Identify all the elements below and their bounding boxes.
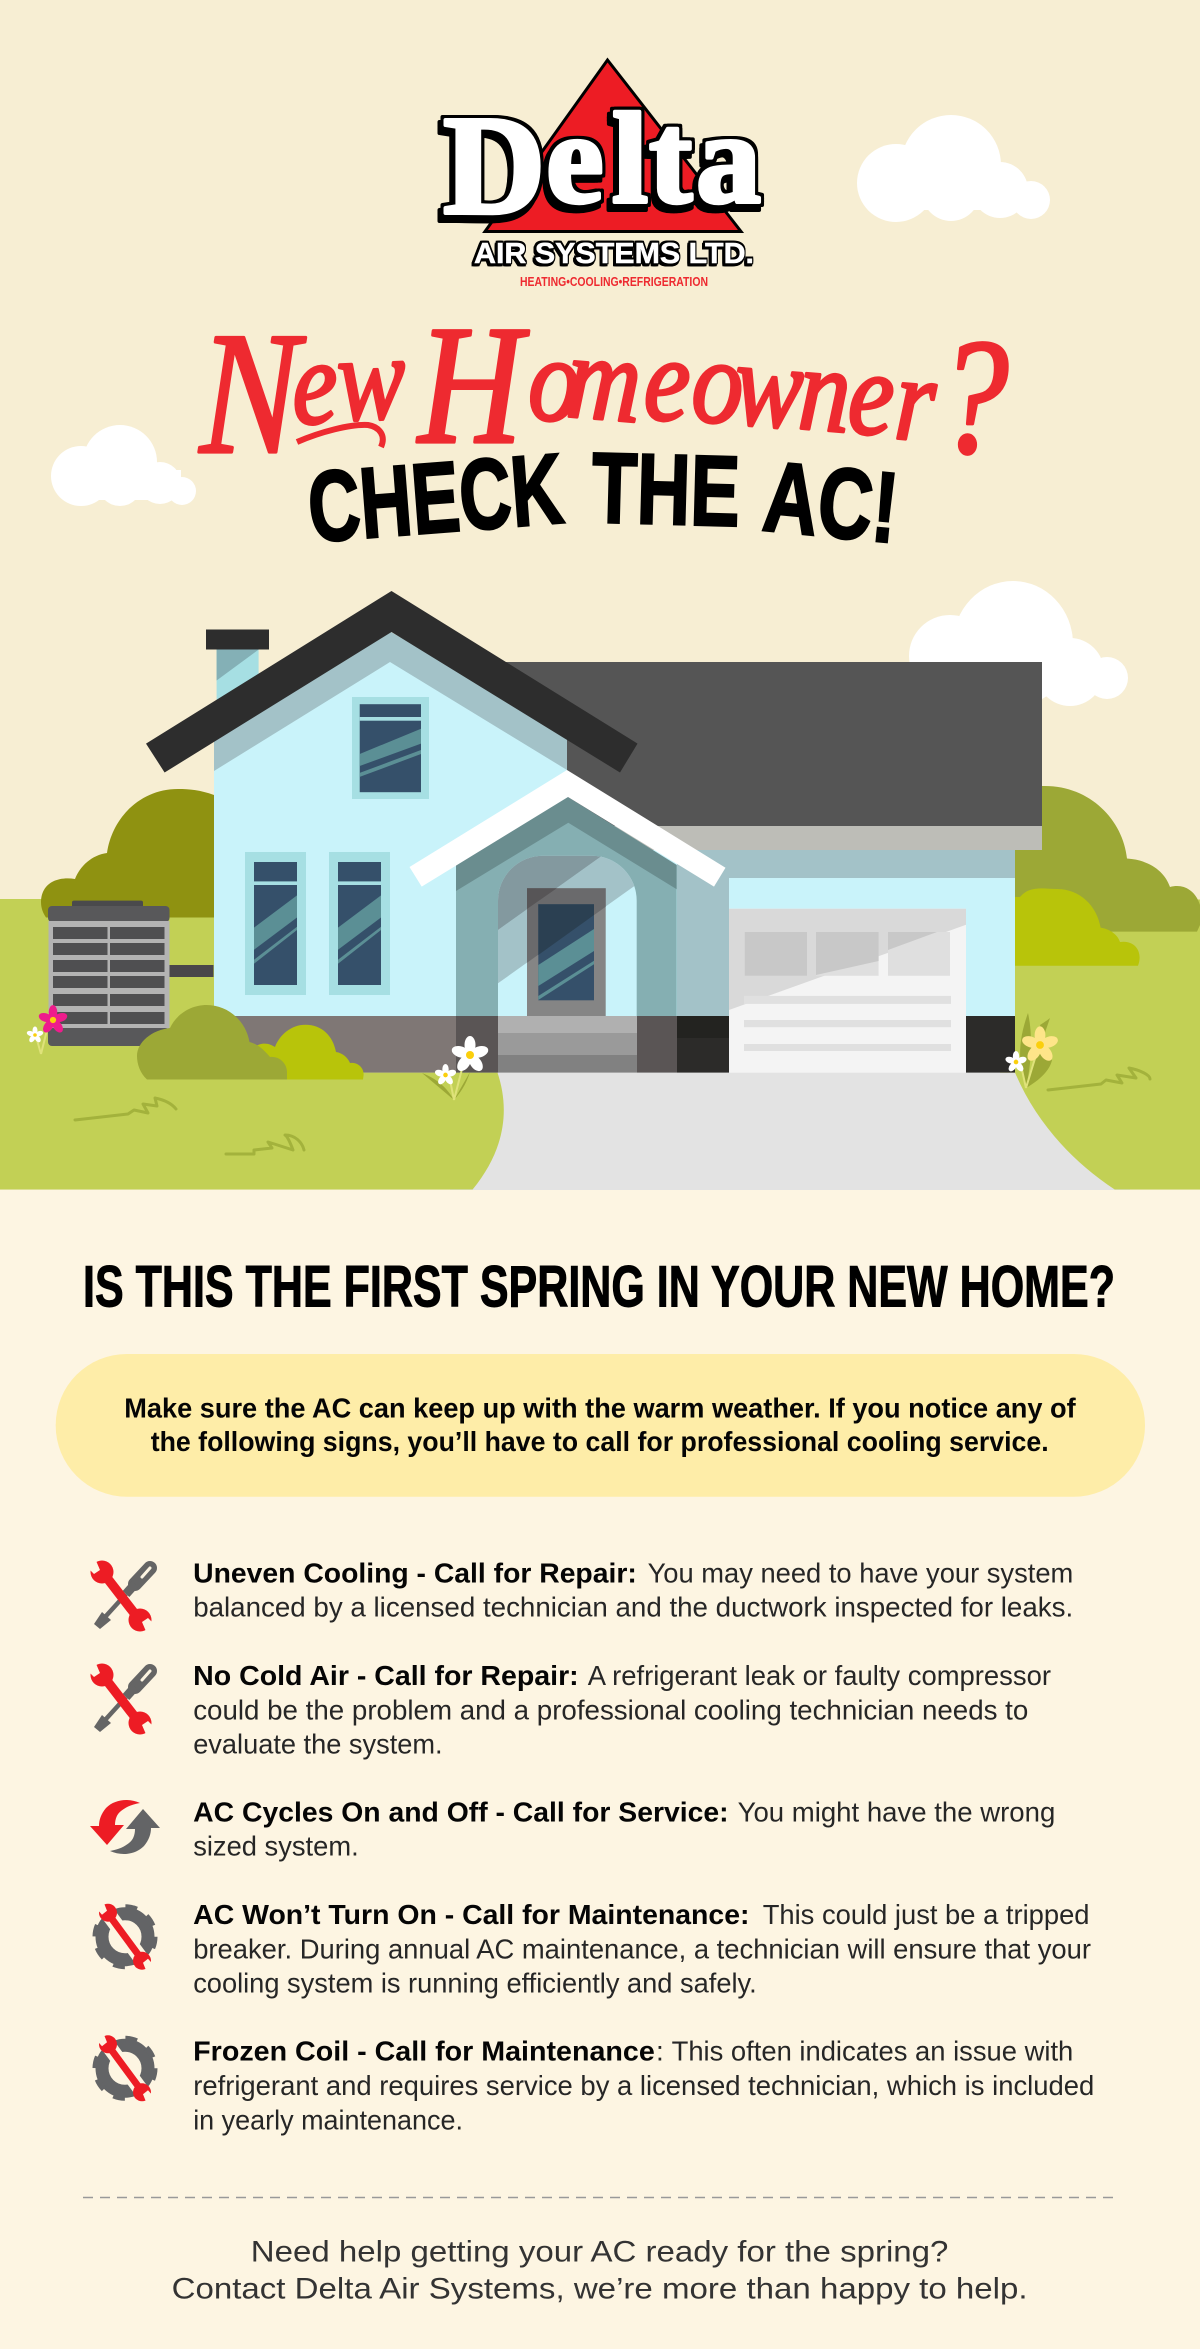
- logo subtitle: AIR SYSTEMS LTD.: [474, 238, 754, 270]
- word: CHECK: CHECK: [304, 433, 567, 564]
- item text: No Cold Air - Call for Repair:: [193, 1660, 579, 1691]
- callout text: the following signs, you’ll have to call for professional cooling service.: [151, 1426, 1049, 1457]
- item text: :: [656, 2036, 664, 2067]
- item: cycles on and off: [90, 1797, 1055, 1862]
- item text: [193, 1797, 1055, 1862]
- item text: This could just be a tripped: [763, 1899, 1090, 1930]
- logo tagline: HEATING•COOLING•REFRIGERATION: [520, 275, 708, 289]
- word: THE: THE: [590, 432, 741, 548]
- item text: Frozen Coil - Call for Maintenance: [193, 2036, 655, 2067]
- item text: [193, 1660, 1051, 1759]
- bush: front olive: [137, 1005, 287, 1080]
- left window 1: [245, 852, 306, 995]
- porch arch: [497, 850, 640, 1020]
- main roof: [146, 591, 638, 772]
- flowers: garage side: [1005, 1013, 1059, 1088]
- cloud: top right: [857, 115, 1050, 222]
- left window 2: [329, 852, 390, 995]
- logo triangle: [485, 60, 741, 232]
- door glass: [538, 904, 594, 1000]
- porch gable: [456, 797, 677, 1016]
- right lawn: [1000, 900, 1200, 1190]
- item text: cooling system is running efficiently and safely.: [193, 1968, 757, 1999]
- callout text: Make sure the AC can keep up with the warm weather. If you notice any of: [124, 1393, 1077, 1424]
- item: no cold air: [83, 1659, 1051, 1759]
- foundation dark sections: [456, 1016, 1015, 1073]
- garage roof: [500, 662, 1042, 826]
- item text: sized system.: [193, 1831, 359, 1862]
- porch steps: [498, 1016, 637, 1073]
- AC pipe: [170, 965, 214, 977]
- scene: yard and house: [0, 591, 1200, 1190]
- logo wordmark: elta: [546, 87, 761, 231]
- garage wall: [560, 850, 1015, 1016]
- icon: cycle arrows: [90, 1800, 160, 1854]
- item text: You might have the wrong: [738, 1797, 1055, 1828]
- item text: refrigerant and requires service by a licensed technician, which is included: [193, 2070, 1094, 2101]
- porch roof trim: [410, 770, 726, 887]
- word: Homeowner?: ?: [938, 307, 1009, 489]
- garage fascia: [560, 826, 1042, 850]
- flowers: left of AC: [26, 1005, 68, 1054]
- title script: New Homeowner?: [198, 291, 1009, 491]
- item text: Uneven Cooling - Call for Repair:: [193, 1558, 637, 1589]
- item text: A refrigerant leak or faulty compressor: [588, 1660, 1051, 1691]
- garage door slats: [744, 996, 951, 1051]
- footer call to action: [172, 2236, 1028, 2305]
- item text: [193, 1899, 1091, 1999]
- logo: [443, 60, 761, 289]
- item text: [193, 1558, 1073, 1623]
- title: CHECK THE AC!: [304, 432, 903, 565]
- driveway: [450, 1072, 1130, 1190]
- item text: You may need to have your system: [648, 1558, 1073, 1589]
- item: frozen coil: [94, 2030, 1094, 2135]
- bush: back right: [1015, 786, 1200, 932]
- logo wordmark: D: [443, 86, 546, 244]
- word: New: ew: [290, 312, 407, 451]
- item text: AC Won’t Turn On - Call for Maintenance:: [193, 1899, 749, 1930]
- flowers: porch: [422, 1036, 490, 1100]
- swash under New: [297, 425, 383, 447]
- icon: gear and wrench: [94, 2030, 156, 2106]
- word: New: N: [198, 297, 306, 491]
- item text: [193, 2036, 1094, 2135]
- sky background: [0, 0, 1200, 1190]
- foundation: [214, 1016, 456, 1073]
- AC louvres: [53, 927, 164, 1024]
- item text: AC Cycles On and Off - Call for Service:: [193, 1797, 729, 1828]
- cloud: behind house: [909, 581, 1128, 707]
- chimney: [206, 630, 269, 724]
- bush: front right: [1015, 888, 1140, 966]
- icon: wrench and screwdriver: [83, 1659, 159, 1739]
- grass tufts: [75, 1068, 1150, 1154]
- left lawn: [0, 899, 504, 1190]
- cloud: left: [51, 425, 196, 506]
- garage door: [729, 909, 966, 1073]
- word: AC!: AC!: [759, 440, 903, 565]
- main wall: [214, 632, 567, 1016]
- bush: back left: [41, 789, 214, 918]
- item: won't turn on: [94, 1899, 1091, 1999]
- icon: gear and wrench: [94, 1899, 156, 1975]
- footer call to action: Need help getting your AC ready for the spring?: [251, 2236, 948, 2269]
- item text: could be the problem and a professional cooling technician needs to: [193, 1694, 1028, 1725]
- callout pill: [56, 1354, 1145, 1497]
- item text: balanced by a licensed technician and the ductwork inspected for leaks.: [193, 1592, 1073, 1623]
- intro callout: [56, 1354, 1145, 1497]
- footer call to action: Contact Delta Air Systems, we’re more than happy to help.: [172, 2272, 1028, 2305]
- item text: This often indicates an issue with: [672, 2036, 1073, 2067]
- word: Homeowner?: H: [416, 291, 530, 480]
- garage door windows: [745, 932, 950, 976]
- icon: wrench and screwdriver: [83, 1556, 159, 1636]
- garage wall shadow: [560, 850, 1015, 1016]
- item text: evaluate the system.: [193, 1728, 443, 1759]
- word: Homeowner?: omeowner: [525, 311, 940, 468]
- bush: front yellow-green: [250, 1025, 364, 1080]
- AC unit: [48, 901, 214, 1046]
- upper window: [352, 697, 429, 799]
- item text: in yearly maintenance.: [193, 2104, 463, 2135]
- item text: breaker. During annual AC maintenance, a technician will ensure that your: [193, 1933, 1091, 1964]
- item: uneven cooling: [83, 1556, 1073, 1636]
- front door: [527, 888, 606, 1016]
